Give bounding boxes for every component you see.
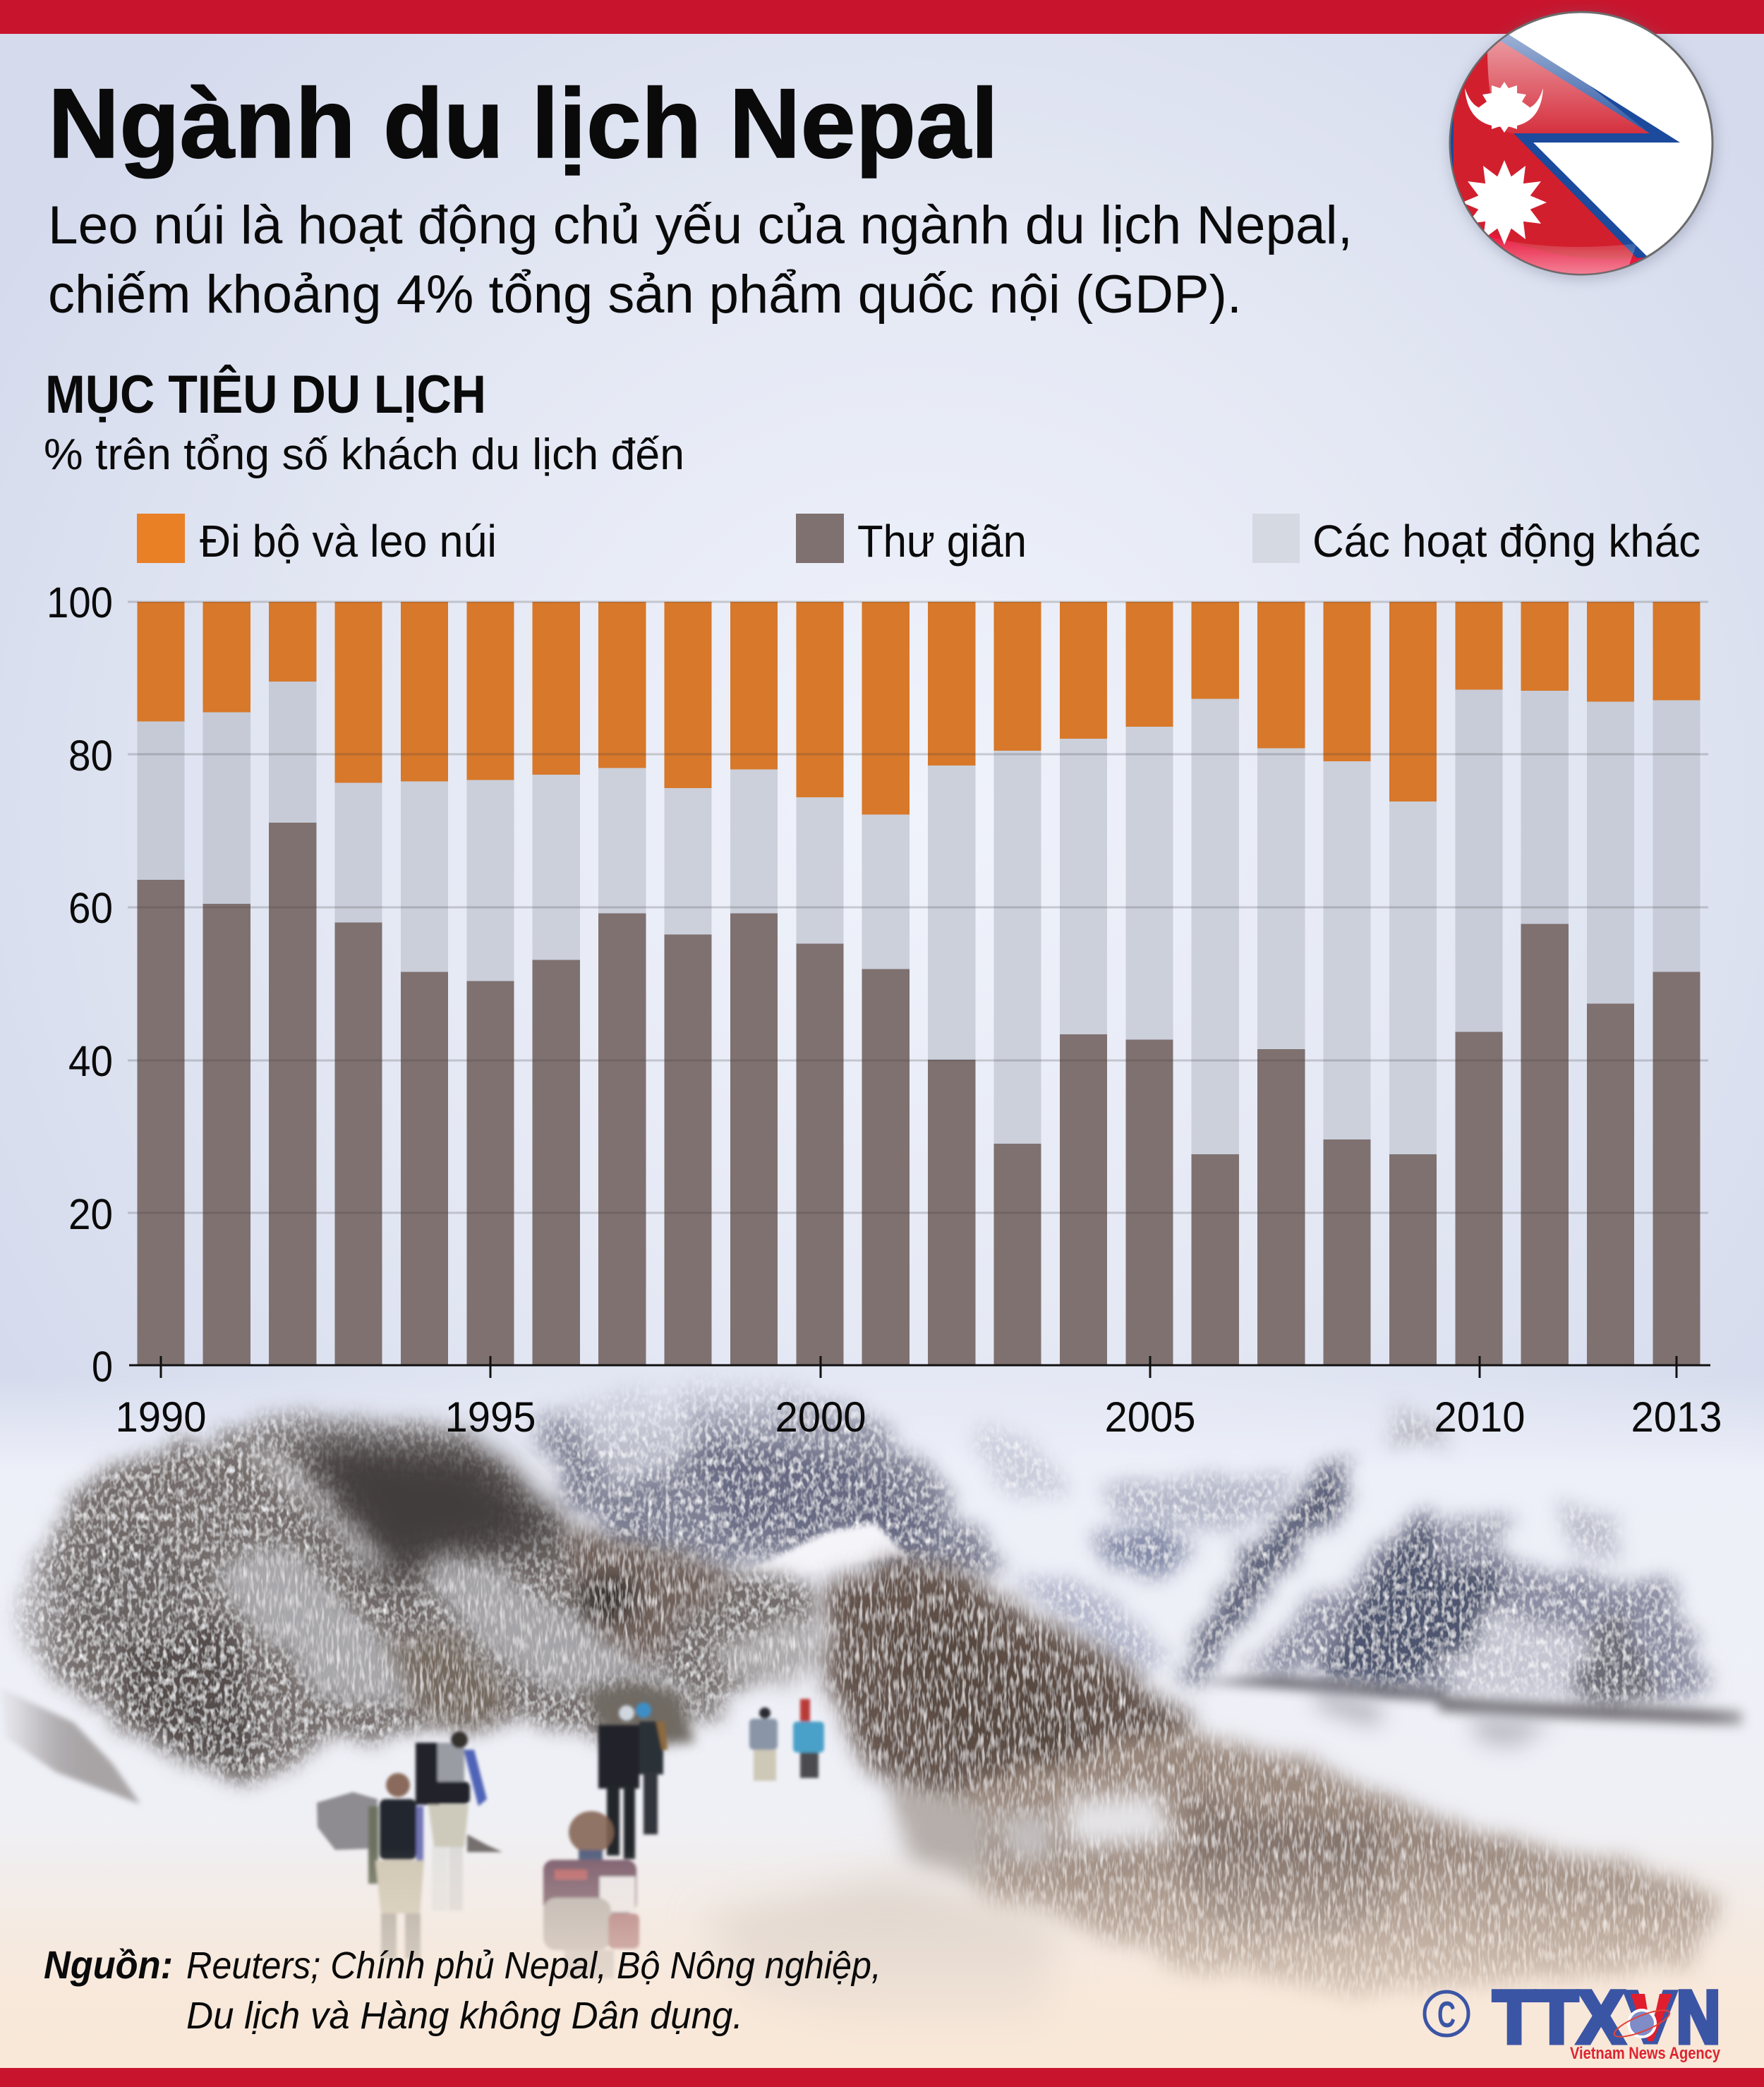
icon: copyright <box>1425 1992 1468 2035</box>
striped snow slopes <box>214 1439 833 1710</box>
y axis labels: 100 <box>47 579 113 627</box>
hiker: foreground <box>543 1811 639 1978</box>
source note <box>44 1942 881 2037</box>
y axis labels: 20 <box>68 1190 113 1238</box>
x axis labels: 2013 <box>1631 1393 1722 1441</box>
subtitle <box>48 195 1353 325</box>
x axis labels: 1995 <box>445 1393 536 1441</box>
y axis labels: 40 <box>68 1037 113 1085</box>
dark core of hillside <box>293 1432 572 1585</box>
snow patch on ridge <box>748 1523 907 1577</box>
hiker pair: centre <box>598 1702 667 1859</box>
x axis labels: 2005 <box>1105 1393 1195 1441</box>
icon: moon <box>1465 82 1543 133</box>
legend: trekking: Đi bộ và leo núi <box>200 516 497 567</box>
source note: Reuters; Chính phủ Nepal, Bộ Nông nghiệp, <box>186 1944 881 1987</box>
y axis labels: 60 <box>68 884 113 932</box>
subtitle: Leo núi là hoạt động chủ yếu của ngành du lịch Nepal, <box>48 195 1353 255</box>
icon: globe <box>1612 2005 1672 2042</box>
x axis labels: 1990 <box>116 1393 206 1441</box>
stacked bar chart <box>47 579 1722 1441</box>
legend: leisure: Thư giãn <box>857 516 1027 567</box>
y axis labels: 0 <box>92 1343 113 1391</box>
icon: Nepal flag button <box>1439 12 1715 282</box>
x axis labels: 2000 <box>775 1393 866 1441</box>
hedge behind hiker pair <box>586 1683 695 1743</box>
faded shrubs near bottom <box>706 1877 1058 2032</box>
hiker: front left <box>368 1773 424 1959</box>
hikers <box>317 1699 824 1978</box>
hiker: rear left with backpack <box>416 1731 487 1911</box>
hiker: far right <box>793 1699 824 1778</box>
logo: TTXVN Vietnam News Agency: Vietnam News Agency <box>1570 2044 1721 2063</box>
source note: Du lịch và Hàng không Dân dụng. <box>186 1995 743 2037</box>
right mountain <box>1180 1408 1715 1703</box>
logo: TTXVN Vietnam News Agency: V <box>1624 1976 1677 2059</box>
legend: leisure <box>796 514 1027 567</box>
hiker: boulder with bag <box>317 1792 377 1850</box>
subtitle: chiếm khoảng 4% tổng sản phẩm quốc nội (GDP). <box>48 265 1242 325</box>
logo: TTXVN Vietnam News Agency: N <box>1677 1976 1720 2059</box>
bag on ground <box>467 1834 502 1852</box>
top red band <box>0 0 1764 34</box>
photo: trekkers in snowy Himalaya <box>0 1372 1764 2071</box>
bottom fade to peach <box>0 1849 1764 2071</box>
central brown bush <box>818 1561 1192 1834</box>
x axis labels <box>116 1393 1722 1441</box>
left hillside <box>11 1408 821 1785</box>
lower brush <box>917 1729 1730 1997</box>
icon: copyright: C <box>1437 1995 1456 2035</box>
y axis labels: 80 <box>68 732 113 780</box>
chart subheading: % trên tổng số khách du lịch đến <box>44 430 684 479</box>
y axis labels <box>47 579 113 1391</box>
bars <box>137 602 1700 1366</box>
legend: other: Các hoạt động khác <box>1312 516 1700 567</box>
chart heading: MỤC TIÊU DU LỊCH <box>45 364 486 425</box>
brown slopes <box>385 1533 732 1729</box>
left edge rock <box>0 1688 140 1804</box>
x axis <box>129 1356 1710 1378</box>
rock ledge <box>1200 1676 1743 1725</box>
x axis labels: 2010 <box>1434 1393 1526 1441</box>
central rock face <box>536 1372 1005 1587</box>
icon: sun <box>1462 160 1547 245</box>
hiker: centre right <box>749 1707 778 1781</box>
source note: Nguồn: <box>44 1942 173 1987</box>
title: Ngành du lịch Nepal <box>48 68 998 179</box>
bottom red band <box>0 2068 1764 2087</box>
logo: TTXVN Vietnam News Agency <box>1425 1976 1721 2063</box>
legend <box>137 514 1700 567</box>
snow patches in brush <box>889 1778 1176 1884</box>
far snowy mountains with rock streaks <box>967 1418 1293 1686</box>
logo: TTXVN Vietnam News Agency: TTX <box>1493 1976 1624 2059</box>
